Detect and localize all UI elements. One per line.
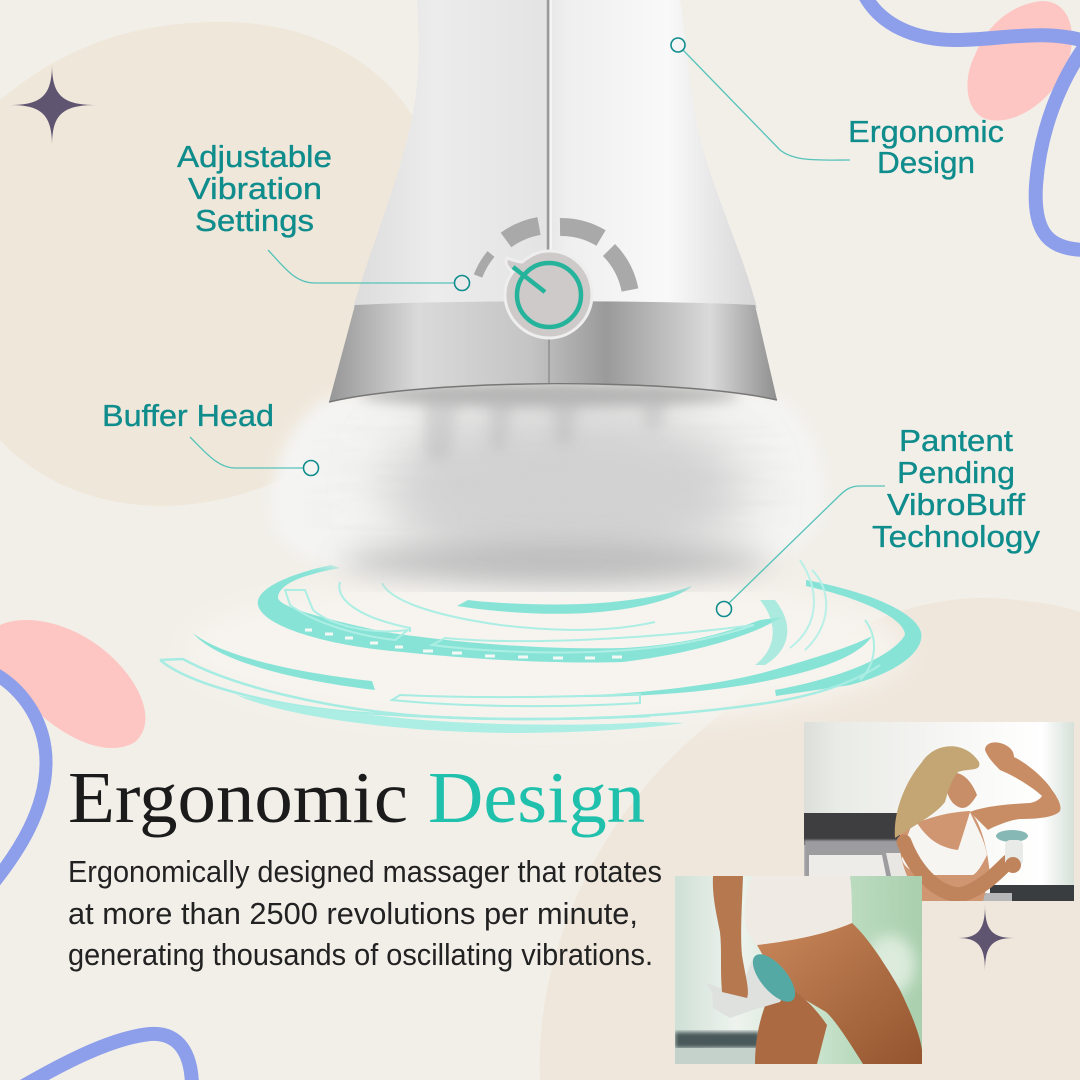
callout: patent pending technology: Technology xyxy=(872,519,1041,554)
body text xyxy=(68,854,662,972)
decoration: bottom-left pink blob xyxy=(0,620,145,748)
product: fluffy buffer head xyxy=(272,383,824,589)
callout: patent pending technology xyxy=(716,423,1041,616)
product: massager body xyxy=(353,0,757,308)
body text: at more than 2500 revolutions per minute, xyxy=(68,896,638,931)
callout: ergonomic design: Design xyxy=(877,145,975,180)
callout: buffer head xyxy=(102,398,318,476)
callout: ergonomic design: Ergonomic xyxy=(848,114,1004,149)
vibration gauge xyxy=(478,226,630,290)
body text: generating thousands of oscillating vibrations. xyxy=(68,937,653,972)
decoration: top-right blue ribbon xyxy=(864,0,1080,250)
body text: Ergonomically designed massager that rotates xyxy=(68,854,662,889)
blob: top-left beige xyxy=(0,22,441,506)
product: silver band xyxy=(329,300,777,402)
callout: patent pending technology: Pantent xyxy=(899,423,1013,458)
callout: adjustable vibration settings: Adjustable xyxy=(177,139,332,174)
photo: woman massaging upper arm xyxy=(804,722,1074,901)
product: power dial xyxy=(505,251,592,338)
icon: sparkle star left xyxy=(10,64,96,146)
vibration rings xyxy=(160,560,921,733)
decoration: bottom blue ribbon xyxy=(20,1034,192,1080)
icon: sparkle star right xyxy=(958,905,1014,971)
callout: patent pending technology: Pending xyxy=(897,455,1015,490)
callout: ergonomic design xyxy=(671,38,1004,180)
photo: woman massaging thigh xyxy=(675,876,922,1064)
decoration: top-right pink blob xyxy=(967,1,1072,121)
callout: buffer head: Buffer Head xyxy=(102,398,274,433)
title: Design xyxy=(428,757,645,838)
blob: bottom-right beige xyxy=(540,598,1080,1080)
decoration: bottom-left blue ribbon xyxy=(0,672,46,885)
callout: adjustable vibration settings: Settings xyxy=(195,203,314,238)
callout: adjustable vibration settings: Vibration xyxy=(188,171,322,206)
callout: adjustable vibration settings xyxy=(177,139,470,290)
title: Ergonomic xyxy=(68,757,408,838)
callout: patent pending technology: VibroBuff xyxy=(887,487,1025,522)
